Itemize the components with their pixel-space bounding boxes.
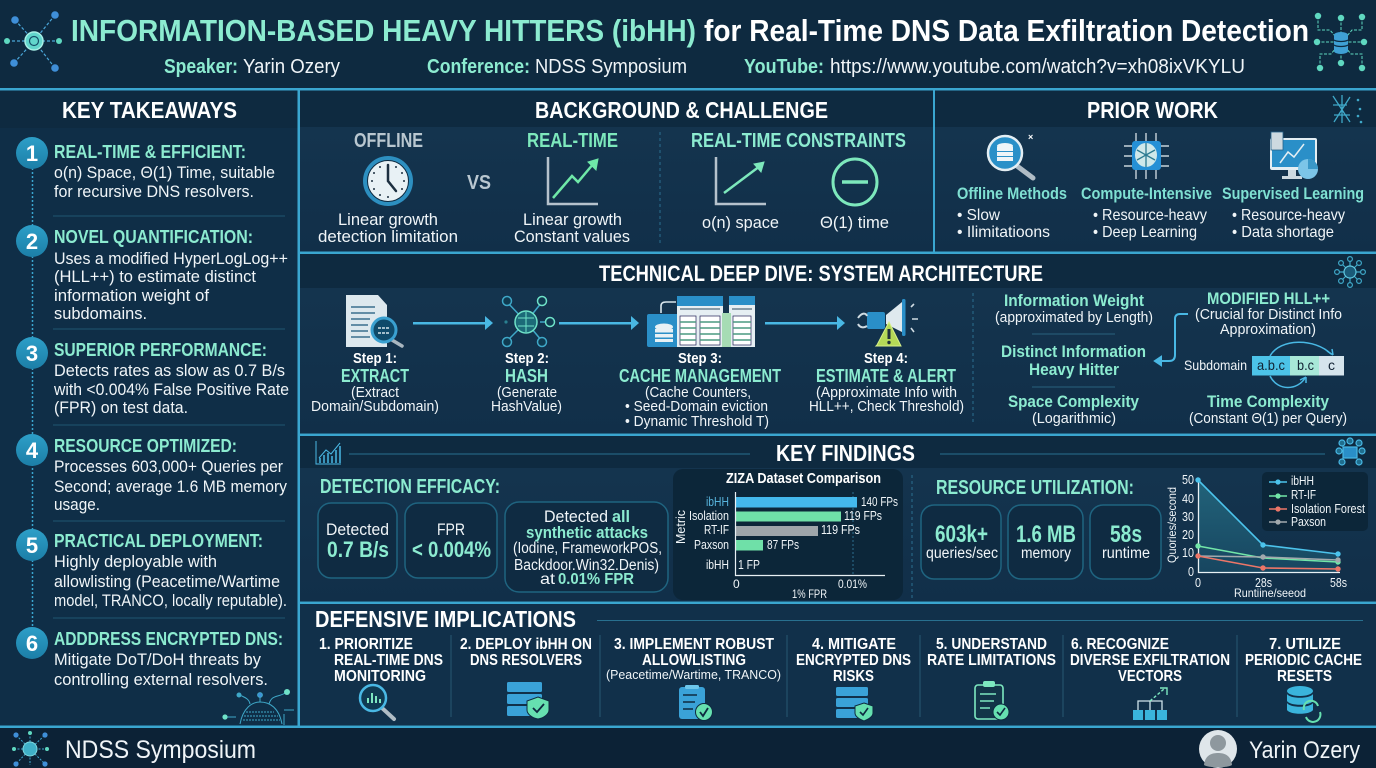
stat: memory: 1.6 MB [1016,521,1076,548]
prior: offline methods [957,184,1067,241]
bar chart: ziza dataset comparison: 87 FPs [767,538,799,552]
step 2: HashValue) [491,398,562,415]
legend: Paxson [1291,515,1326,529]
takeaway 3: Detects rates as slow as 0.7 B/s [54,361,285,380]
footer event name: NDSS Symposium [65,736,256,764]
concept: modified hll++: MODIFIED HLL++ [1207,289,1330,308]
stat: synthetic attacks: synthetic attacks [526,523,648,542]
heading: key takeaways: KEY TAKEAWAYS [62,97,237,123]
real-time column: REAL-TIME [527,130,618,152]
bar chart: ziza dataset comparison: 140 FPs [861,495,898,509]
stat: queries: 603k+ [935,521,988,548]
takeaway 6: Mitigate DoT/DoH threats by [54,650,261,669]
icon: network corner [1335,257,1365,287]
takeaway 2: 2 [26,229,38,254]
line chart: runtime comparison: 0 [1195,575,1201,590]
offline column [318,130,458,246]
step 3: CACHE MANAGEMENT [619,366,781,386]
takeaway 6: ADDDRESS ENCRYPTED DNS: [54,629,283,649]
step 1: Domain/Subdomain) [311,398,439,415]
line chart: runtime comparison: 30 [1182,509,1194,524]
offline column: Linear growth [338,210,438,229]
takeaway 6: 6 [26,631,38,656]
panel: key takeaways [0,91,298,726]
line chart: runtime comparison: 40 [1182,491,1194,506]
panel: background and challenge [300,91,933,252]
takeaway 2: Uses a modified HyperLogLog++ [54,249,288,268]
arrow 2 [559,316,639,330]
step 1 [311,295,439,415]
icon: linear arrow chart [716,157,766,204]
constraints column: o(n) space [702,213,779,232]
icon: growth chart [548,157,598,204]
stat: synthetic attacks: at [540,571,556,588]
icon: clipboard check [679,685,712,720]
stat: detected [318,503,397,578]
step 4: HLL++, Check Threshold) [809,398,964,415]
line chart: runtime comparison: Runtiine/seeod [1234,586,1306,600]
legend [1262,472,1368,531]
prior: offline methods: Offline Methods [957,184,1067,203]
icon: bar chart corner [316,441,341,464]
heading: key findings: KEY FINDINGS [776,440,915,466]
step 4: Step 4: [864,350,908,367]
icon: hierarchy arrow [1133,688,1167,720]
constraints column [691,130,906,232]
item 7: RESETS [1277,668,1332,685]
concept: time complexity: (Constant Θ(1) per Query) [1189,410,1347,427]
step 2: Step 2: [505,350,549,367]
stat: synthetic attacks: (Iodine, FrameworkPOS, [513,540,662,557]
bar chart: ziza dataset comparison: 1% FPR [792,587,827,601]
speaker line: Speaker: [164,56,238,78]
takeaway 4: Processes 603,000+ Queries per [54,457,283,476]
item 1 [319,636,443,719]
speaker line [164,56,1245,78]
heading: prior work: PRIOR WORK [1087,97,1218,123]
concept: modified hll++ [1195,289,1342,338]
step 3 [619,296,781,430]
icon: clock [363,156,413,206]
diagram: subdomain boxes: b.c [1297,357,1314,373]
stat: fpr [405,503,497,578]
item 6: DIVERSE EXFILTRATION [1070,652,1230,669]
step 4: (Approximate Info with [816,384,957,401]
takeaway 2: information weight of [54,286,209,305]
diagram: subdomain boxes: Subdomain [1184,357,1247,373]
icon: circuit corner [1333,95,1362,123]
item 4: ENCRYPTED DNS [796,652,911,669]
item 4: 4. MITIGATE [812,636,896,653]
step 1: EXTRACT [341,366,409,386]
bar chart: ziza dataset comparison: RT-IF [704,523,729,537]
line chart: runtime comparison: 28s [1255,575,1272,590]
stat: synthetic attacks: Detected [544,507,608,526]
item 5 [927,636,1056,720]
concept: time complexity [1189,392,1347,427]
bar chart: ziza dataset comparison: ZIZA Dataset Comparison [726,471,881,487]
stat: queries [921,505,1001,579]
bar chart: ziza dataset comparison: 119 FPs [844,509,882,523]
legend: Isolation Forest [1291,502,1365,516]
item 3: ALLOWLISTING [642,652,746,669]
takeaway 2: (HLL++) to estimate distinct [54,267,256,286]
takeaway 3 [16,337,289,417]
real-time column: Constant values [514,227,630,246]
concept: information weight: (approximated by Length) [995,309,1153,326]
constraints column: Θ(1) time [820,213,889,232]
item 3: (Peacetime/Wartime, TRANCO) [606,667,781,682]
heading: technical: TECHNICAL DEEP DIVE: SYSTEM ARCHITECTURE [599,261,1043,286]
step 4: ESTIMATE & ALERT [816,366,956,386]
stat: runtime: runtime [1102,545,1150,562]
item 1: REAL-TIME DNS [334,652,443,669]
concept: modified hll++: (Crucial for Distinct Info [1195,306,1342,323]
heading: defensive implications: DEFENSIVE IMPLICATIONS [315,606,576,632]
icon: server shield [507,682,549,719]
takeaway 3: SUPERIOR PERFORMANCE: [54,340,267,360]
item 7 [1245,636,1362,722]
item 4: RISKS [833,668,874,685]
takeaway 1: for recursive DNS resolvers. [54,182,254,201]
title [71,13,1309,48]
concept: distinct information heavy hitter: Distinct Information [1001,342,1146,361]
constraints column: REAL-TIME CONSTRAINTS [691,130,906,152]
step 3: Step 3: [678,350,722,367]
bar chart: ziza dataset comparison: 0.01% [838,577,867,591]
stat: synthetic attacks: Backdoor.Win32.Denis) [514,557,659,574]
icon: footer network [12,731,49,767]
takeaway 3: 3 [26,341,38,366]
offline column: OFFLINE [354,130,423,152]
bar chart: ziza dataset comparison: ibHH [706,558,729,572]
speaker line: Conference: [427,56,530,78]
series: Paxson [1198,554,1341,563]
stat: runtime [1090,505,1161,579]
icon: database magnifier [988,132,1033,178]
prior: compute-intensive [1081,184,1212,241]
icon: hash network [502,296,554,346]
bar chart: ziza dataset comparison: 1 FP [738,558,760,572]
line chart: runtime comparison: 0 [1188,564,1194,579]
stat: detected: Detected [326,520,389,539]
bar chart: ziza dataset comparison: 119 FPs [821,523,860,537]
item 7: 7. UTILIZE [1269,636,1341,653]
prior: supervised learning [1222,184,1364,241]
stat: runtime: 58s [1110,521,1142,548]
takeaway 1: 1 [26,141,38,166]
takeaway 1: REAL-TIME & EFFICIENT: [54,142,246,162]
bar chart: ziza dataset comparison: 0 [733,577,740,591]
footer speaker name: Yarin Ozery [1249,737,1360,764]
takeaway 4: usage. [54,495,100,514]
prior: offline methods: • Slow [957,207,1000,224]
item 6 [1070,636,1230,720]
bar chart: ziza dataset comparison: Metric [674,510,688,544]
concept: space complexity: Space Complexity [1008,392,1139,411]
icon: clipboard checklist [975,681,1009,720]
prior: supervised learning: • Data shortage [1232,224,1334,241]
speaker line: Yarin Ozery [243,56,340,78]
diagram: subdomain boxes: c [1328,357,1335,373]
takeaway 6 [16,627,283,689]
item 5: 5. UNDERSTAND [936,636,1047,653]
icon: server shield [836,687,873,721]
series: RT-IF [1195,543,1341,565]
icon: database magnifier: × [1028,132,1033,142]
prior: compute-intensive: • Deep Learning [1093,224,1197,241]
vs label: VS [467,172,491,194]
real-time column [514,130,630,246]
takeaway 4 [16,434,287,514]
step 3: (Cache Counters, [645,384,751,401]
icon: cache tables [647,296,755,347]
line chart: runtime comparison [1165,472,1368,600]
takeaway 2 [16,225,288,323]
diagram: subdomain boxes [1184,342,1344,388]
prior: offline methods: • Ilimitatioons [957,224,1050,241]
stat: memory: memory [1021,545,1071,562]
diagram: subdomain boxes: a.b.c [1257,357,1285,373]
bar chart: ziza dataset comparison: Isolation [689,509,729,523]
prior: supervised learning: • Resource-heavy [1232,207,1345,224]
offline column: detection limitation [318,227,458,246]
stat: synthetic attacks: 0.01% FPR [558,571,634,588]
line chart: runtime comparison: 50 [1182,472,1194,487]
icon: monitoring magnifier [360,685,394,719]
stat: detected: 0.7 B/s [327,537,389,562]
item 4 [796,636,911,721]
stat: fpr: FPR [437,520,465,539]
prior: compute-intensive: Compute-Intensive [1081,184,1212,203]
panel: defensive implications [300,604,1376,725]
stat: fpr: < 0.004% [412,537,491,562]
panel: technical deep dive [300,254,1376,433]
arrow: hll to distinct [1155,314,1188,365]
step 2: HASH [505,366,548,386]
stat: memory [1008,505,1083,579]
takeaway 3: with <0.004% False Positive Rate [53,380,289,399]
concept: space complexity [1008,392,1139,427]
heading: detection efficacy: DETECTION EFFICACY: [320,476,500,498]
line chart: runtime comparison: 10 [1182,545,1194,560]
item 2: 2. DEPLOY ibHH ON [460,636,592,653]
takeaway 5 [16,529,287,610]
icon: brain chip [1124,133,1169,179]
concept: information weight [995,292,1153,326]
item 2: DNS RESOLVERS [470,652,582,669]
heading: background: BACKGROUND & CHALLENGE [535,97,828,123]
takeaway 5: model, TRANCO, locally reputable). [54,591,287,610]
legend: ibHH [1291,474,1314,488]
header banner [0,0,1376,88]
bar chart: ziza dataset comparison [673,469,903,601]
concept: space complexity: (Logarithmic) [1032,410,1116,427]
heading: resource utilization: RESOURCE UTILIZATION: [936,477,1134,499]
takeaway 1 [16,137,275,201]
icon: chip network corner [1336,438,1365,465]
footer bar [0,728,1376,768]
line chart: runtime comparison: 58s [1330,575,1347,590]
step 2: (Generate [497,384,557,401]
arrow 3 [765,316,845,330]
line chart: runtime comparison: 20 [1182,527,1194,542]
takeaway 1: o(n) Space, Θ(1) Time, suitable [54,163,275,182]
concept: distinct information heavy hitter [1001,342,1146,379]
item 5: RATE LIMITATIONS [927,652,1056,669]
item 3 [606,636,781,720]
icon: database network right [1314,13,1367,71]
stat: synthetic attacks [505,502,668,592]
item 2 [460,636,592,719]
speaker line: https://www.youtube.com/watch?v=xh08ixVKYLU [830,56,1245,78]
bar chart: ziza dataset comparison: Paxson [694,538,729,552]
icon: database reset [1287,686,1320,722]
panel: key findings [300,436,1376,601]
title: INFORMATION-BASED HEAVY HITTERS (ibHH) [71,13,696,48]
step 4 [809,299,964,415]
speaker line: YouTube: [744,56,824,78]
avatar [1199,730,1237,768]
bar chart: ziza dataset comparison: ibHH [706,495,729,509]
panel: prior work [935,91,1376,252]
icon: theta circle [833,159,877,205]
step 3: • Dynamic Threshold T) [625,413,769,430]
stat: queries: queries/sec [926,545,998,562]
concept: time complexity: Time Complexity [1207,392,1329,411]
item 1: 1. PRIORITIZE [319,636,413,653]
line chart: runtime comparison: Quories/second [1165,487,1179,563]
icon: network hub left [4,11,62,72]
legend: RT-IF [1291,488,1316,502]
icon: megaphone alert [858,299,918,346]
takeaway 6: controlling external resolvers. [54,670,268,689]
takeaway 2: NOVEL QUANTIFICATION: [54,227,253,247]
prior: compute-intensive: • Resource-heavy [1093,207,1207,224]
series: Isolation Forest [1195,553,1341,572]
takeaway 3: (FPR) on test data. [54,398,188,417]
item 3: 3. IMPLEMENT ROBUST [614,636,774,653]
takeaway 5: Highly deployable with [54,552,217,571]
icon: document magnifier [346,295,402,347]
concept: modified hll++: Approximation) [1220,321,1316,338]
real-time column: Linear growth [523,210,622,229]
arrow 1 [413,316,493,330]
takeaway 4: RESOURCE OPTIMIZED: [54,436,237,456]
takeaway 4: Second; average 1.6 MB memory [54,477,287,496]
takeaway 5: allowlisting (Peacetime/Wartime [54,572,280,591]
title: for Real-Time DNS Data Exfiltration Detection [704,13,1309,48]
stat: synthetic attacks: all [612,507,630,526]
icon: chip dome [222,689,294,725]
item 1: MONITORING [334,668,426,685]
icon: analytics monitor [1270,132,1318,179]
takeaway 4: 4 [26,438,39,463]
step 1: Step 1: [353,350,397,367]
takeaway 2: subdomains. [54,304,147,323]
concept: distinct information heavy hitter: Heavy Hitter [1029,360,1119,379]
item 6: 6. RECOGNIZE [1071,636,1169,653]
takeaway 5: 5 [26,533,38,558]
step 1: (Extract [351,384,400,401]
series: ibHH [1195,477,1341,557]
step 2 [491,296,562,415]
concept: information weight: Information Weight [1004,292,1144,310]
speaker line: NDSS Symposium [535,56,687,78]
step 3: • Seed-Domain eviction [625,398,768,415]
takeaway 5: PRACTICAL DEPLOYMENT: [54,531,263,551]
item 6: VECTORS [1118,668,1182,685]
